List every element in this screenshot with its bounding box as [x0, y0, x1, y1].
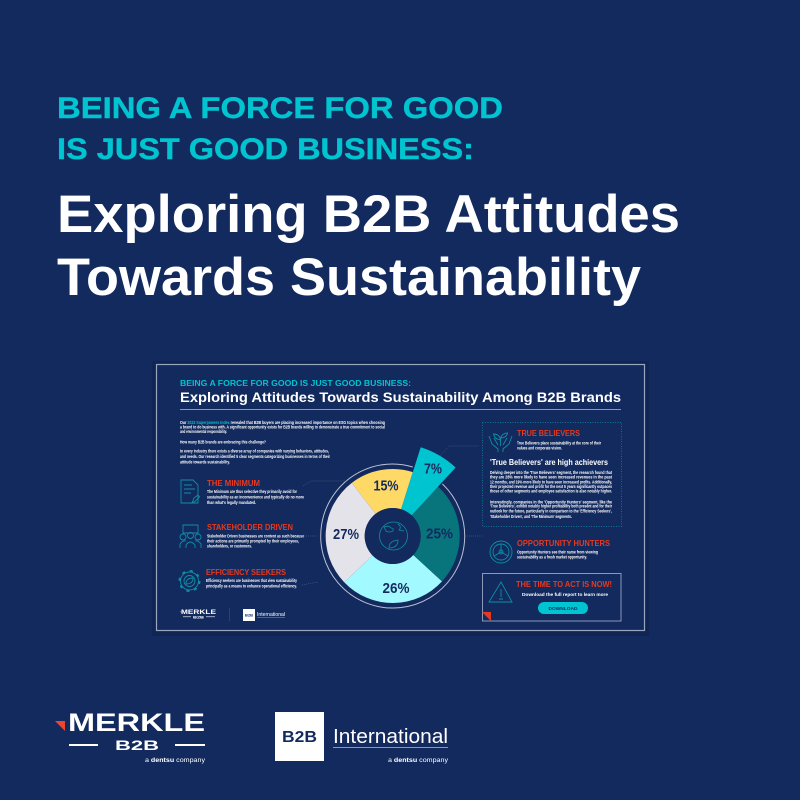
segment: stakeholder driven: their actions are primarily prompted by their employees,: [207, 538, 299, 544]
Merkle B2B logo: MERKLE: [68, 709, 205, 737]
slice 7% highlighted: [401, 447, 456, 515]
chart ring: [321, 464, 465, 608]
slice 25%: [412, 487, 460, 581]
true believers panel: 'True Believers', exhibit notably higher profitability both present and for their: [490, 504, 612, 508]
Merkle B2B logo: [55, 709, 206, 764]
true believers panel: [482, 422, 622, 526]
card heading: Exploring Attitudes Towards Sustainability Among B2B Brands: [180, 390, 621, 406]
card heading: [180, 379, 621, 410]
segment: stakeholder driven: [180, 522, 305, 548]
true believers panel: True Believers place sustainability at the core of their: [517, 440, 601, 446]
segment: efficiency seekers: Efficiency seekers are businesses that view sustainability: [206, 578, 298, 583]
segment: stakeholder driven: Stakeholder Driven businesses are content as such because: [207, 534, 305, 538]
slice 15%: [352, 469, 413, 514]
true believers panel: 'True Believers' are high achievers: [490, 457, 608, 467]
intro text: Our 2023 Superpowers Index revealed that B2B buyers are placing increased importance on ESG topics when choosing: [180, 420, 385, 425]
icon: people with speech bubble: [180, 525, 201, 548]
icon: compass wheel: [490, 541, 512, 563]
true believers panel: 'Stakeholder Driven', and 'The Minimum' segments.: [490, 514, 572, 519]
segment: the minimum: THE MINIMUM: [207, 478, 260, 488]
true believers panel: values and corporate vision.: [517, 446, 562, 450]
Merkle B2B logo: B2B: [115, 737, 159, 753]
segment: the minimum: [181, 478, 305, 505]
call to action box: [482, 574, 621, 621]
true believers panel: Delving deeper into the 'True Believers' segment, the research found that: [490, 470, 613, 475]
card logos: B2B: [245, 614, 254, 618]
slice 25%: 25%: [426, 526, 453, 542]
intro text: attitude towards sustainability.: [180, 460, 230, 464]
opportunity hunters: OPPORTUNITY HUNTERS: [517, 538, 610, 548]
true believers panel: 12 months, and 19% more likely to have seen increased profits. Additionally,: [490, 480, 612, 484]
slice 7% highlighted: 7%: [424, 462, 442, 478]
infographic preview card: [152, 361, 649, 636]
opportunity hunters: [490, 538, 610, 563]
kicker heading: IS JUST GOOD BUSINESS:: [57, 133, 474, 166]
icon: gear with leaf: [180, 571, 200, 591]
kicker heading: [57, 92, 503, 166]
leader lines: [300, 446, 483, 585]
card heading: BEING A FORCE FOR GOOD IS JUST GOOD BUSINESS:: [180, 379, 411, 388]
main title: [57, 185, 680, 307]
main title: Exploring B2B Attitudes: [57, 185, 680, 244]
donut chart: [300, 446, 483, 608]
Merkle B2B logo: a dentsu company: [145, 757, 206, 764]
call to action box: THE TIME TO ACT IS NOW!: [516, 579, 612, 589]
red corner: [482, 612, 491, 621]
slice 15%: 15%: [374, 478, 399, 494]
true believers panel: they are 28% more likely to have seen increased revenues in the past: [490, 474, 613, 480]
intro text: How many B2B brands are embracing this challenge?: [180, 440, 266, 444]
intro text: and needs. Our research identified 5 clear segments categorizing businesses in terms of their: [180, 454, 330, 459]
B2B International logo: B2B: [282, 729, 317, 746]
download button: DOWNLOAD: [548, 606, 578, 612]
card logos: [180, 608, 285, 621]
slice 26%: [344, 555, 442, 603]
intro text: In every industry there exists a diverse array of companies with varying behaviors, attitudes,: [180, 448, 329, 454]
segment: stakeholder driven: STAKEHOLDER DRIVEN: [207, 522, 293, 532]
card logos: International: [257, 612, 285, 618]
icon: globe with leaf: [365, 508, 421, 564]
icon: warning triangle: [489, 582, 512, 602]
card logos: MERKLE: [181, 609, 217, 616]
segment: efficiency seekers: [180, 567, 298, 591]
main title: Towards Sustainability: [57, 248, 642, 307]
call to action box: Download the full report to learn more: [522, 592, 608, 598]
segment: efficiency seekers: principally as a means to enhance operational efficiency.: [206, 584, 297, 588]
slice 27%: 27%: [333, 527, 359, 543]
true believers panel: their projected revenue and profit for the next 5 years significantly outpaces: [490, 484, 613, 489]
intro text: a brand to do business with. A significant opportunity exists for B2B brands willing to demonstrate a true commitment to social: [180, 424, 385, 430]
segment: the minimum: The Minimum are thus selective they primarily avoid for: [207, 489, 297, 494]
true believers panel: those of other segments and employee satisfaction is also notably higher.: [490, 488, 612, 494]
true believers panel: TRUE BELIEVERS: [517, 428, 580, 438]
segment: efficiency seekers: EFFICIENCY SEEKERS: [206, 567, 286, 577]
segment: the minimum: than what's legally mandated.: [207, 500, 256, 505]
opportunity hunters: sustainability as a fresh market opportunity.: [517, 554, 587, 560]
segment: the minimum: sustainability as an inconvenience and typically do no more: [207, 494, 305, 500]
B2B International logo: [275, 712, 449, 764]
B2B International logo: a dentsu company: [388, 757, 449, 764]
icon: hands holding plant: [489, 433, 512, 452]
true believers panel: outlook for the future, particularly in comparison to the 'Efficiency Seekers',: [490, 508, 612, 514]
true believers panel: Interestingly, companies in the 'Opportunity Hunters' segment, like the: [490, 500, 613, 504]
kicker heading: BEING A FORCE FOR GOOD: [57, 92, 503, 125]
intro text: [180, 420, 385, 464]
segment: stakeholder driven: shareholders, or customers.: [207, 544, 252, 548]
slice 26%: 26%: [382, 581, 410, 597]
B2B International logo: International: [333, 726, 448, 748]
card logos: B2B: [193, 616, 205, 620]
intro text: and environmental responsibility.: [180, 429, 227, 434]
opportunity hunters: Opportunity Hunters see their name from viewing: [517, 550, 598, 554]
icon: document: [181, 480, 200, 503]
slice 27%: [326, 483, 376, 582]
